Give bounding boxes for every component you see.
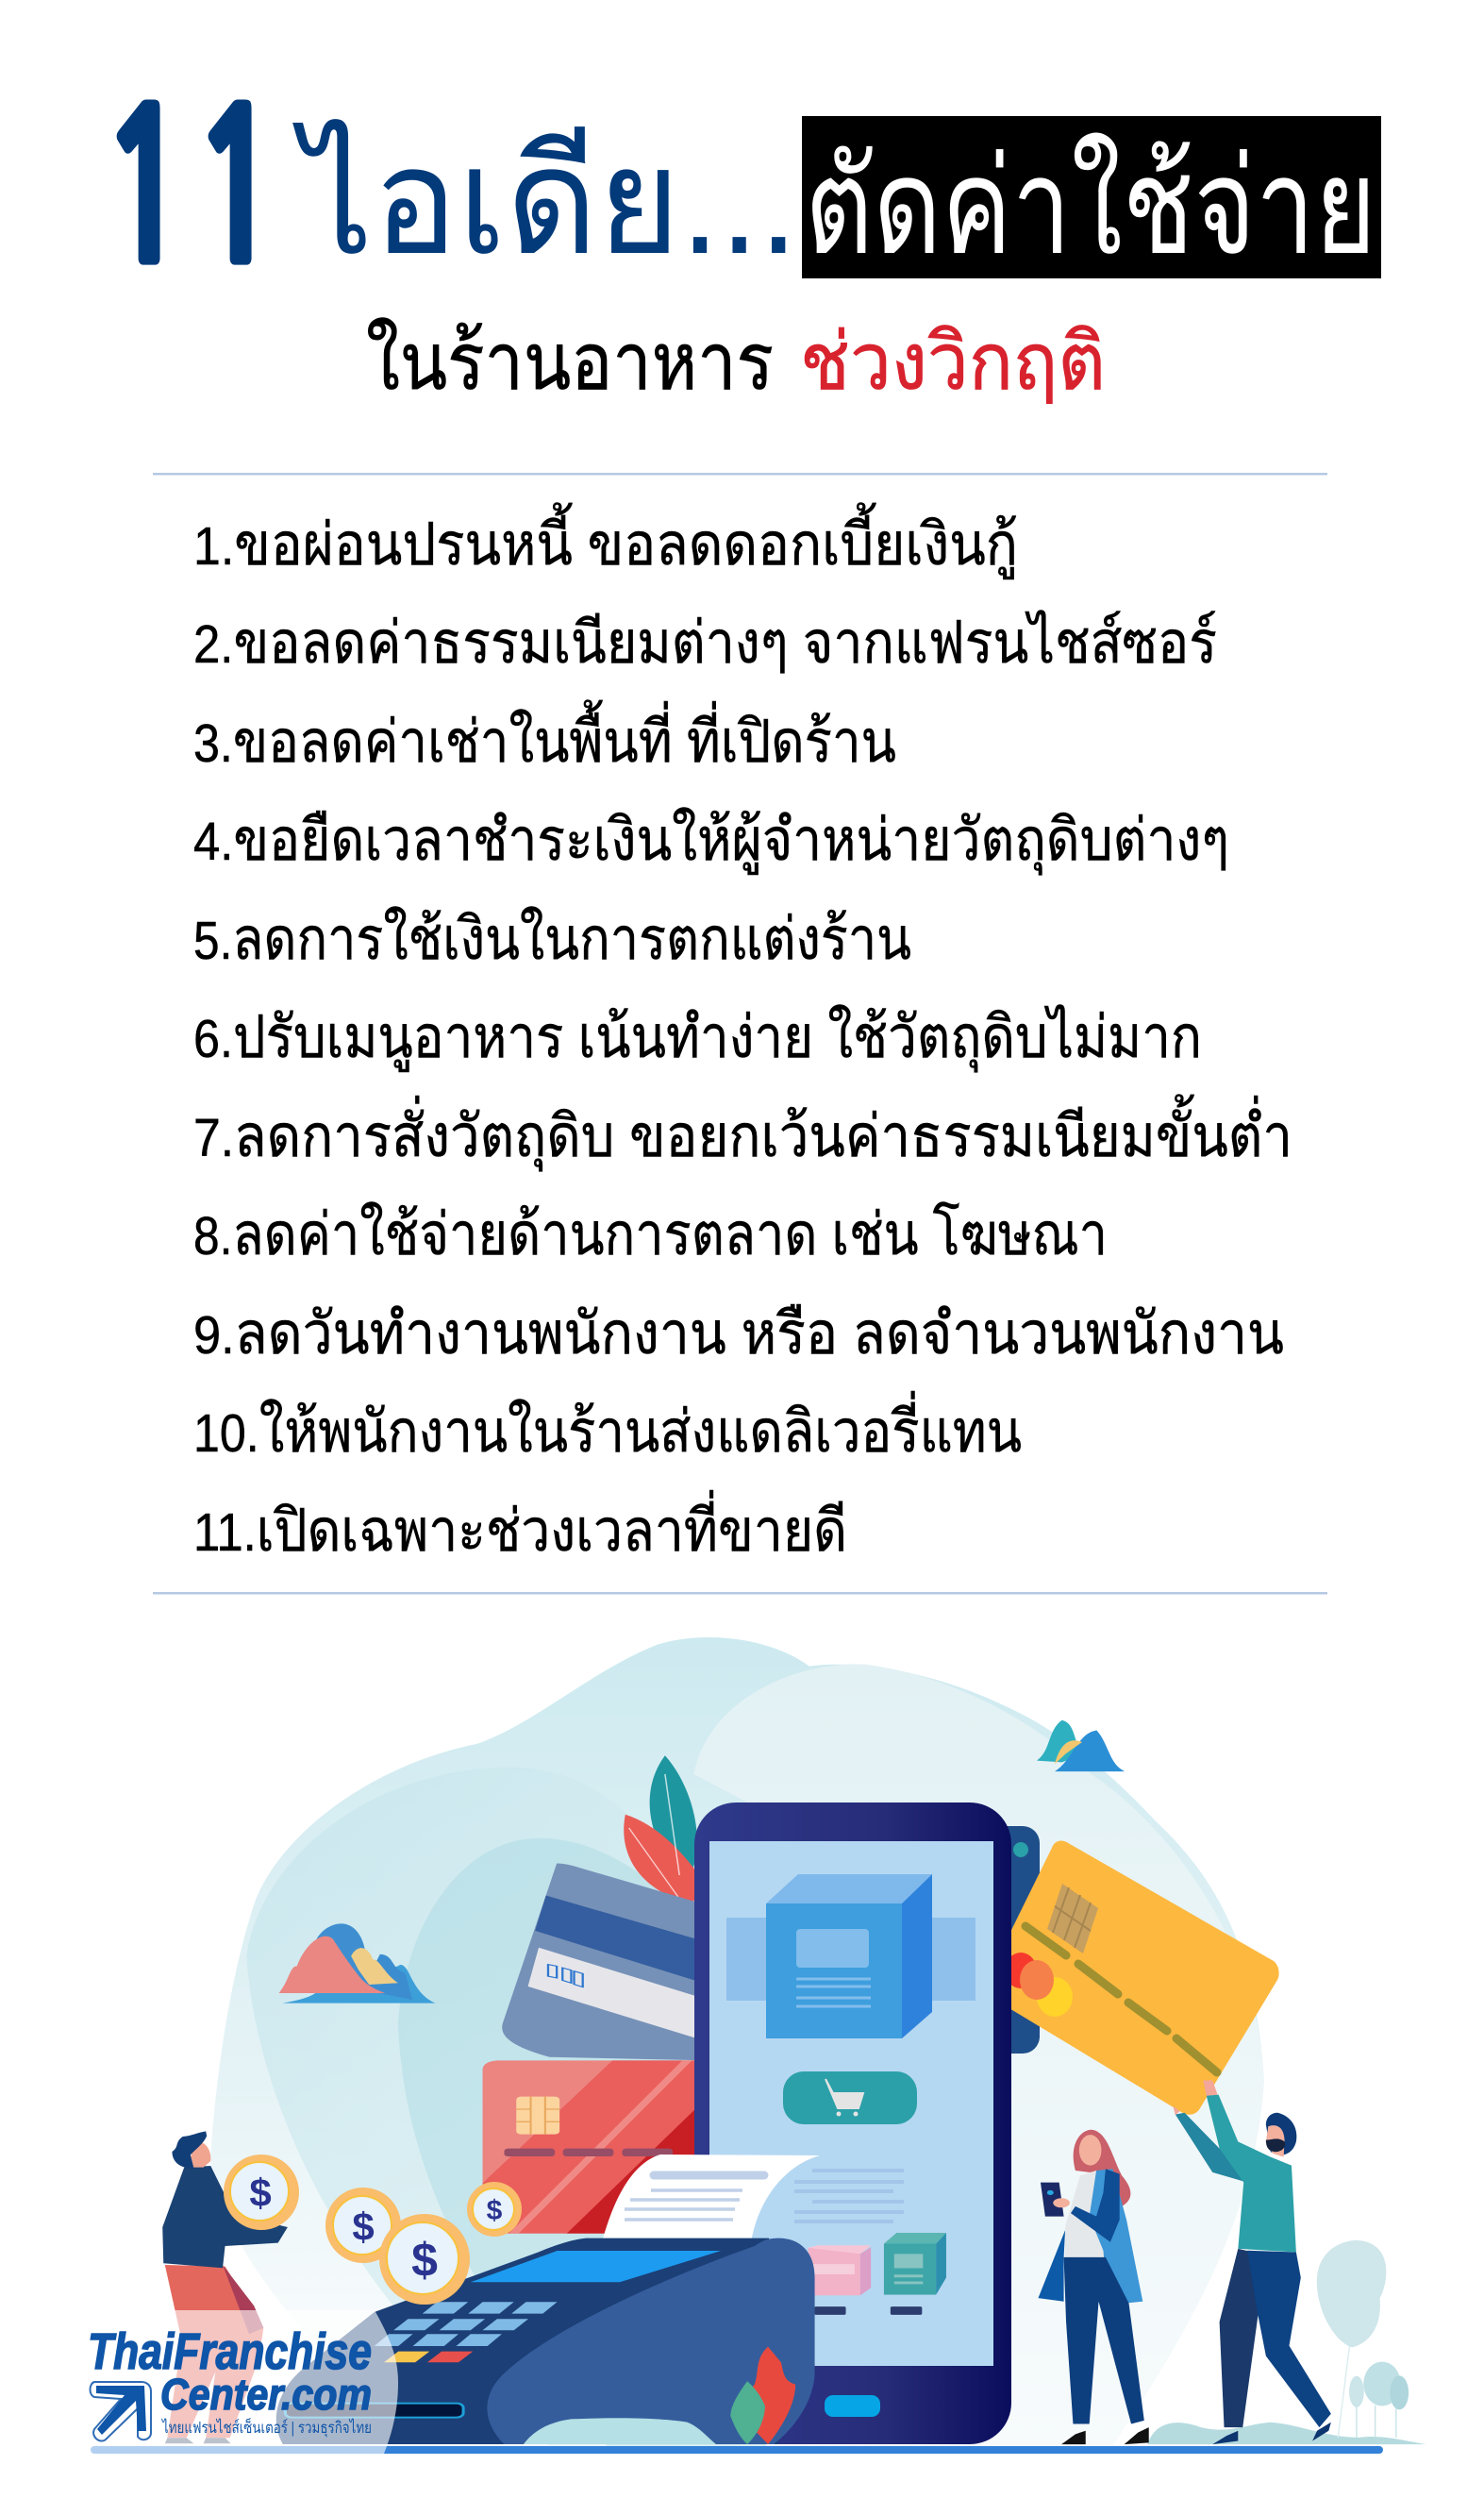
- coin 3: $: [411, 2234, 438, 2287]
- item 2: 2.ขอลดค่าธรรมเนียมต่างๆ จากแฟรนไชส์ซอร์: [193, 610, 1217, 676]
- subtitle: ในร้านอาหาร: [366, 317, 774, 406]
- icon: right cloud: [1037, 1720, 1125, 1771]
- item 8: 8.ลดค่าใช้จ่ายด้านการตลาด เช่น โฆษณา: [193, 1201, 1108, 1267]
- yellow credit card: [981, 1841, 1279, 2115]
- phone button: [825, 2395, 880, 2417]
- logo: ThaiFranchise Center.com: [85, 2310, 398, 2454]
- title: 11: 11: [100, 86, 283, 292]
- red credit card: [483, 2060, 697, 2234]
- icon: left cloud: [279, 1923, 436, 2004]
- coin 4: $: [487, 2195, 503, 2226]
- item 3: 3.ขอลดค่าเช่าในพื้นที่ ที่เปิดร้าน: [193, 699, 896, 775]
- item 7: 7.ลดการสั่งวัตถุดิบ ขอยกเว้นค่าธรรมเนียมขั้นต่ำ: [193, 1094, 1292, 1171]
- illustration: payment scene: [85, 1637, 1426, 2454]
- card slot: [285, 2404, 463, 2418]
- cart button: [783, 2071, 917, 2124]
- small boxes: [809, 2233, 946, 2315]
- blue credit card: [502, 1864, 709, 2060]
- coin 3: [379, 2214, 470, 2305]
- item 5: 5.ลดการใช้เงินในการตกแต่งร้าน: [193, 906, 911, 972]
- smartphone: [694, 1802, 1011, 2444]
- receipt: [601, 2155, 820, 2251]
- coin 4: [467, 2182, 522, 2237]
- logo arrow: [91, 2382, 151, 2441]
- subtitle: [366, 317, 1106, 406]
- item 6: 6.ปรับเมนูอาหาร เน้นทำง่าย ใช้วัตถุดิบไม่มาก: [193, 1004, 1202, 1072]
- ground plants and trees: [1147, 2240, 1426, 2444]
- POS card machine: [276, 2238, 815, 2444]
- product box: [726, 1874, 975, 2038]
- phone screen: [709, 1841, 993, 2366]
- coin 1: $: [249, 2171, 272, 2215]
- title: idea: ไอเดีย...: [292, 119, 798, 285]
- logo tagline: ไทยแฟรนไชส์เซ็นเตอร์ | รวมธุรกิจไทย: [160, 2417, 372, 2438]
- left person holding coin: [162, 2131, 288, 2443]
- leaves: [624, 1755, 709, 1903]
- item 10: 10.ให้พนักงานในร้านส่งแดลิเวอรี่แทน: [193, 1391, 1022, 1465]
- item 9: 9.ลดวันทำงานพนักงาน หรือ ลดจำนวนพนักงาน: [193, 1301, 1284, 1366]
- logo backdrop: [85, 2310, 398, 2454]
- background blobs: [210, 1637, 1264, 2446]
- subtitle: ช่วงวิกฤติ: [800, 317, 1106, 406]
- logo wordmark: ThaiFranchise: [88, 2323, 372, 2380]
- base line: [91, 2446, 1383, 2454]
- woman with tablet: [1038, 2130, 1149, 2444]
- item 11: 11.เปิดเฉพาะช่วงเวลาที่ขายดี: [193, 1490, 847, 1564]
- phone back: [991, 1826, 1040, 2054]
- item 4: 4.ขอยืดเวลาชำระเงินให้ผู้จำหน่ายวัตถุดิบต่างๆ: [193, 807, 1229, 875]
- coin 1: [224, 2155, 299, 2230]
- item 1: 1.ขอผ่อนปรนหนี้ ขอลดดอกเบี้ยเงินกู้: [193, 502, 1018, 579]
- list of 11 ideas: [193, 502, 1292, 1564]
- plant: [750, 2347, 795, 2444]
- keypad: [375, 2302, 558, 2346]
- man lifting card: [1173, 2081, 1331, 2444]
- coin 2: [325, 2188, 401, 2263]
- screen text lines: [794, 2171, 904, 2222]
- coin 2: $: [352, 2205, 375, 2249]
- logo: ThaiFranchise Center.com: Center.com: [160, 2370, 372, 2419]
